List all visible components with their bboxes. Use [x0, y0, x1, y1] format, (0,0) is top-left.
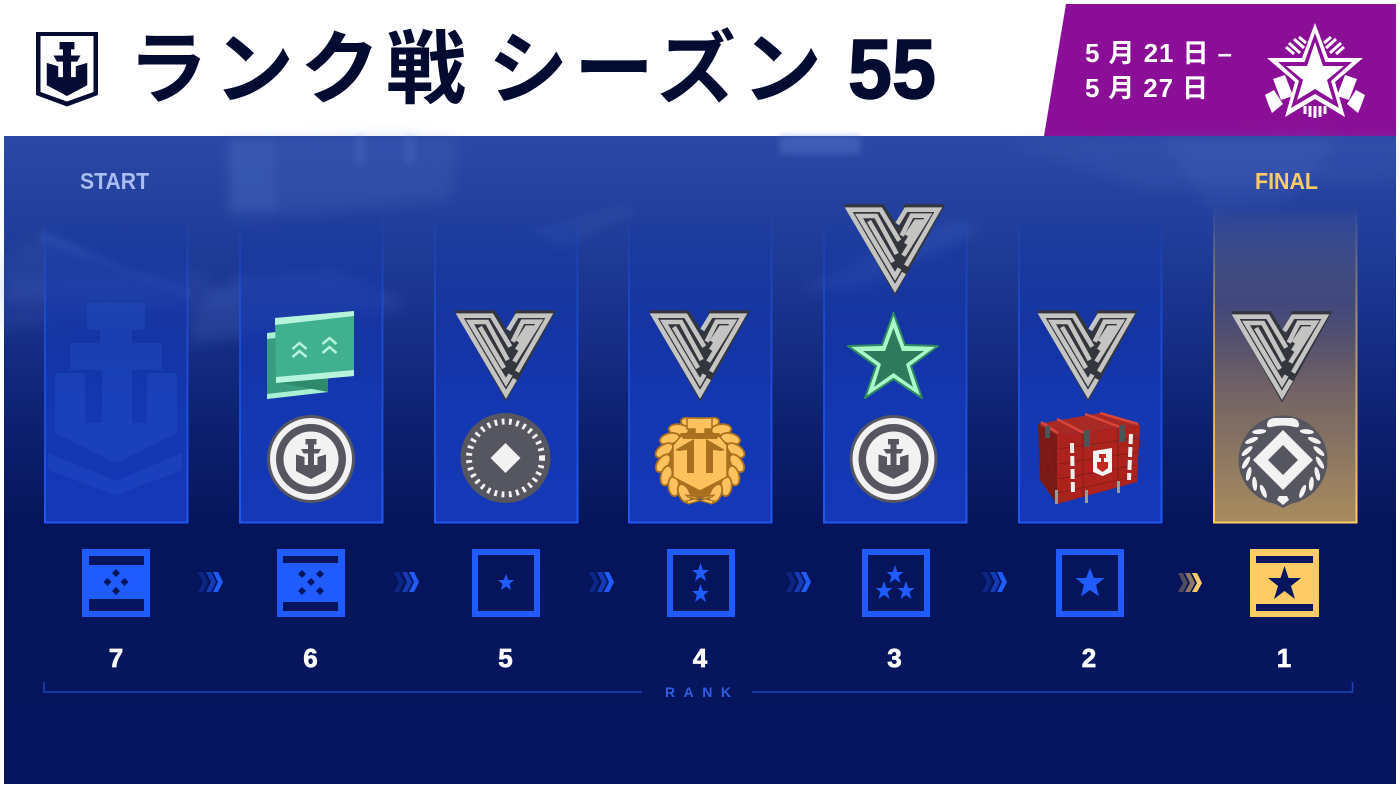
panel: rank 2 column — [1019, 205, 1162, 522]
panel: date banner — [1044, 4, 1396, 136]
rank numbers: 6 — [303, 643, 318, 673]
icon: chevron insignia — [650, 311, 749, 400]
arrow: 5 to 4 — [589, 572, 614, 592]
icon: chevron insignia — [1038, 311, 1137, 400]
icon: rank 6 insignia — [277, 549, 345, 617]
date text: 5 月 27 日 — [1085, 73, 1208, 103]
icon: green ticket — [267, 311, 354, 399]
title: ランク戦 — [128, 25, 472, 114]
icon: anchor ring badge — [850, 415, 938, 503]
icon: rank 1 insignia — [1250, 549, 1319, 617]
title: シーズン — [488, 25, 828, 114]
icon: season star emblem — [1265, 23, 1365, 118]
arrow: 4 to 3 — [786, 572, 811, 592]
rank numbers: 2 — [1082, 643, 1096, 673]
icon: rank 3 insignia — [865, 552, 927, 614]
icon: anchor ring badge — [267, 415, 355, 503]
panel: rank 6 column — [240, 205, 382, 522]
rank numbers: 1 — [1277, 643, 1291, 673]
date text: 5 月 21 日 – — [1085, 38, 1232, 68]
icon: gold laurel badge — [653, 415, 747, 505]
icon: laurel diamond badge — [1238, 416, 1328, 508]
arrow: 2 to 1 — [1178, 573, 1202, 592]
panel: rank 7 column (start) — [45, 205, 188, 522]
panel: rank 1 column (final) — [1214, 205, 1356, 522]
icon: chevron insignia — [845, 205, 944, 294]
arrow: 3 to 2 — [982, 572, 1007, 592]
date text — [1085, 38, 1232, 103]
icon: dashed diamond badge — [460, 413, 550, 503]
rank numbers: 5 — [498, 643, 513, 673]
arrow: 7 to 6 — [198, 572, 223, 592]
panel: rank 5 column — [435, 205, 578, 522]
FINAL label: FINAL — [1255, 168, 1318, 194]
icon: rank 2 insignia — [1059, 552, 1121, 614]
icon: chevron insignia — [456, 311, 555, 400]
icon: green star — [848, 313, 938, 398]
RANK label: RANK — [665, 684, 731, 700]
icon: chevron insignia — [1232, 312, 1331, 401]
icon: rank 7 insignia — [82, 549, 150, 617]
icon: red crate — [1038, 413, 1140, 504]
icon: rank 5 insignia — [475, 552, 537, 614]
title — [128, 22, 936, 116]
arrow: 6 to 5 — [394, 572, 419, 592]
title: 55 — [848, 22, 936, 116]
icon: faded shield watermark — [48, 303, 182, 495]
header white band — [0, 0, 1400, 136]
rank numbers: 4 — [693, 643, 708, 673]
rank bracket — [44, 682, 1352, 692]
rank numbers — [109, 643, 1291, 673]
panel: rank 3 column — [824, 205, 966, 522]
START label: START — [80, 168, 149, 194]
panel: rank 4 column — [629, 205, 772, 522]
rank numbers: 7 — [109, 643, 123, 673]
rank numbers: 3 — [887, 643, 902, 673]
icon: game shield logo — [36, 32, 98, 106]
icon: rank 4 insignia — [670, 552, 732, 614]
blurred ship backdrop — [0, 136, 1400, 345]
